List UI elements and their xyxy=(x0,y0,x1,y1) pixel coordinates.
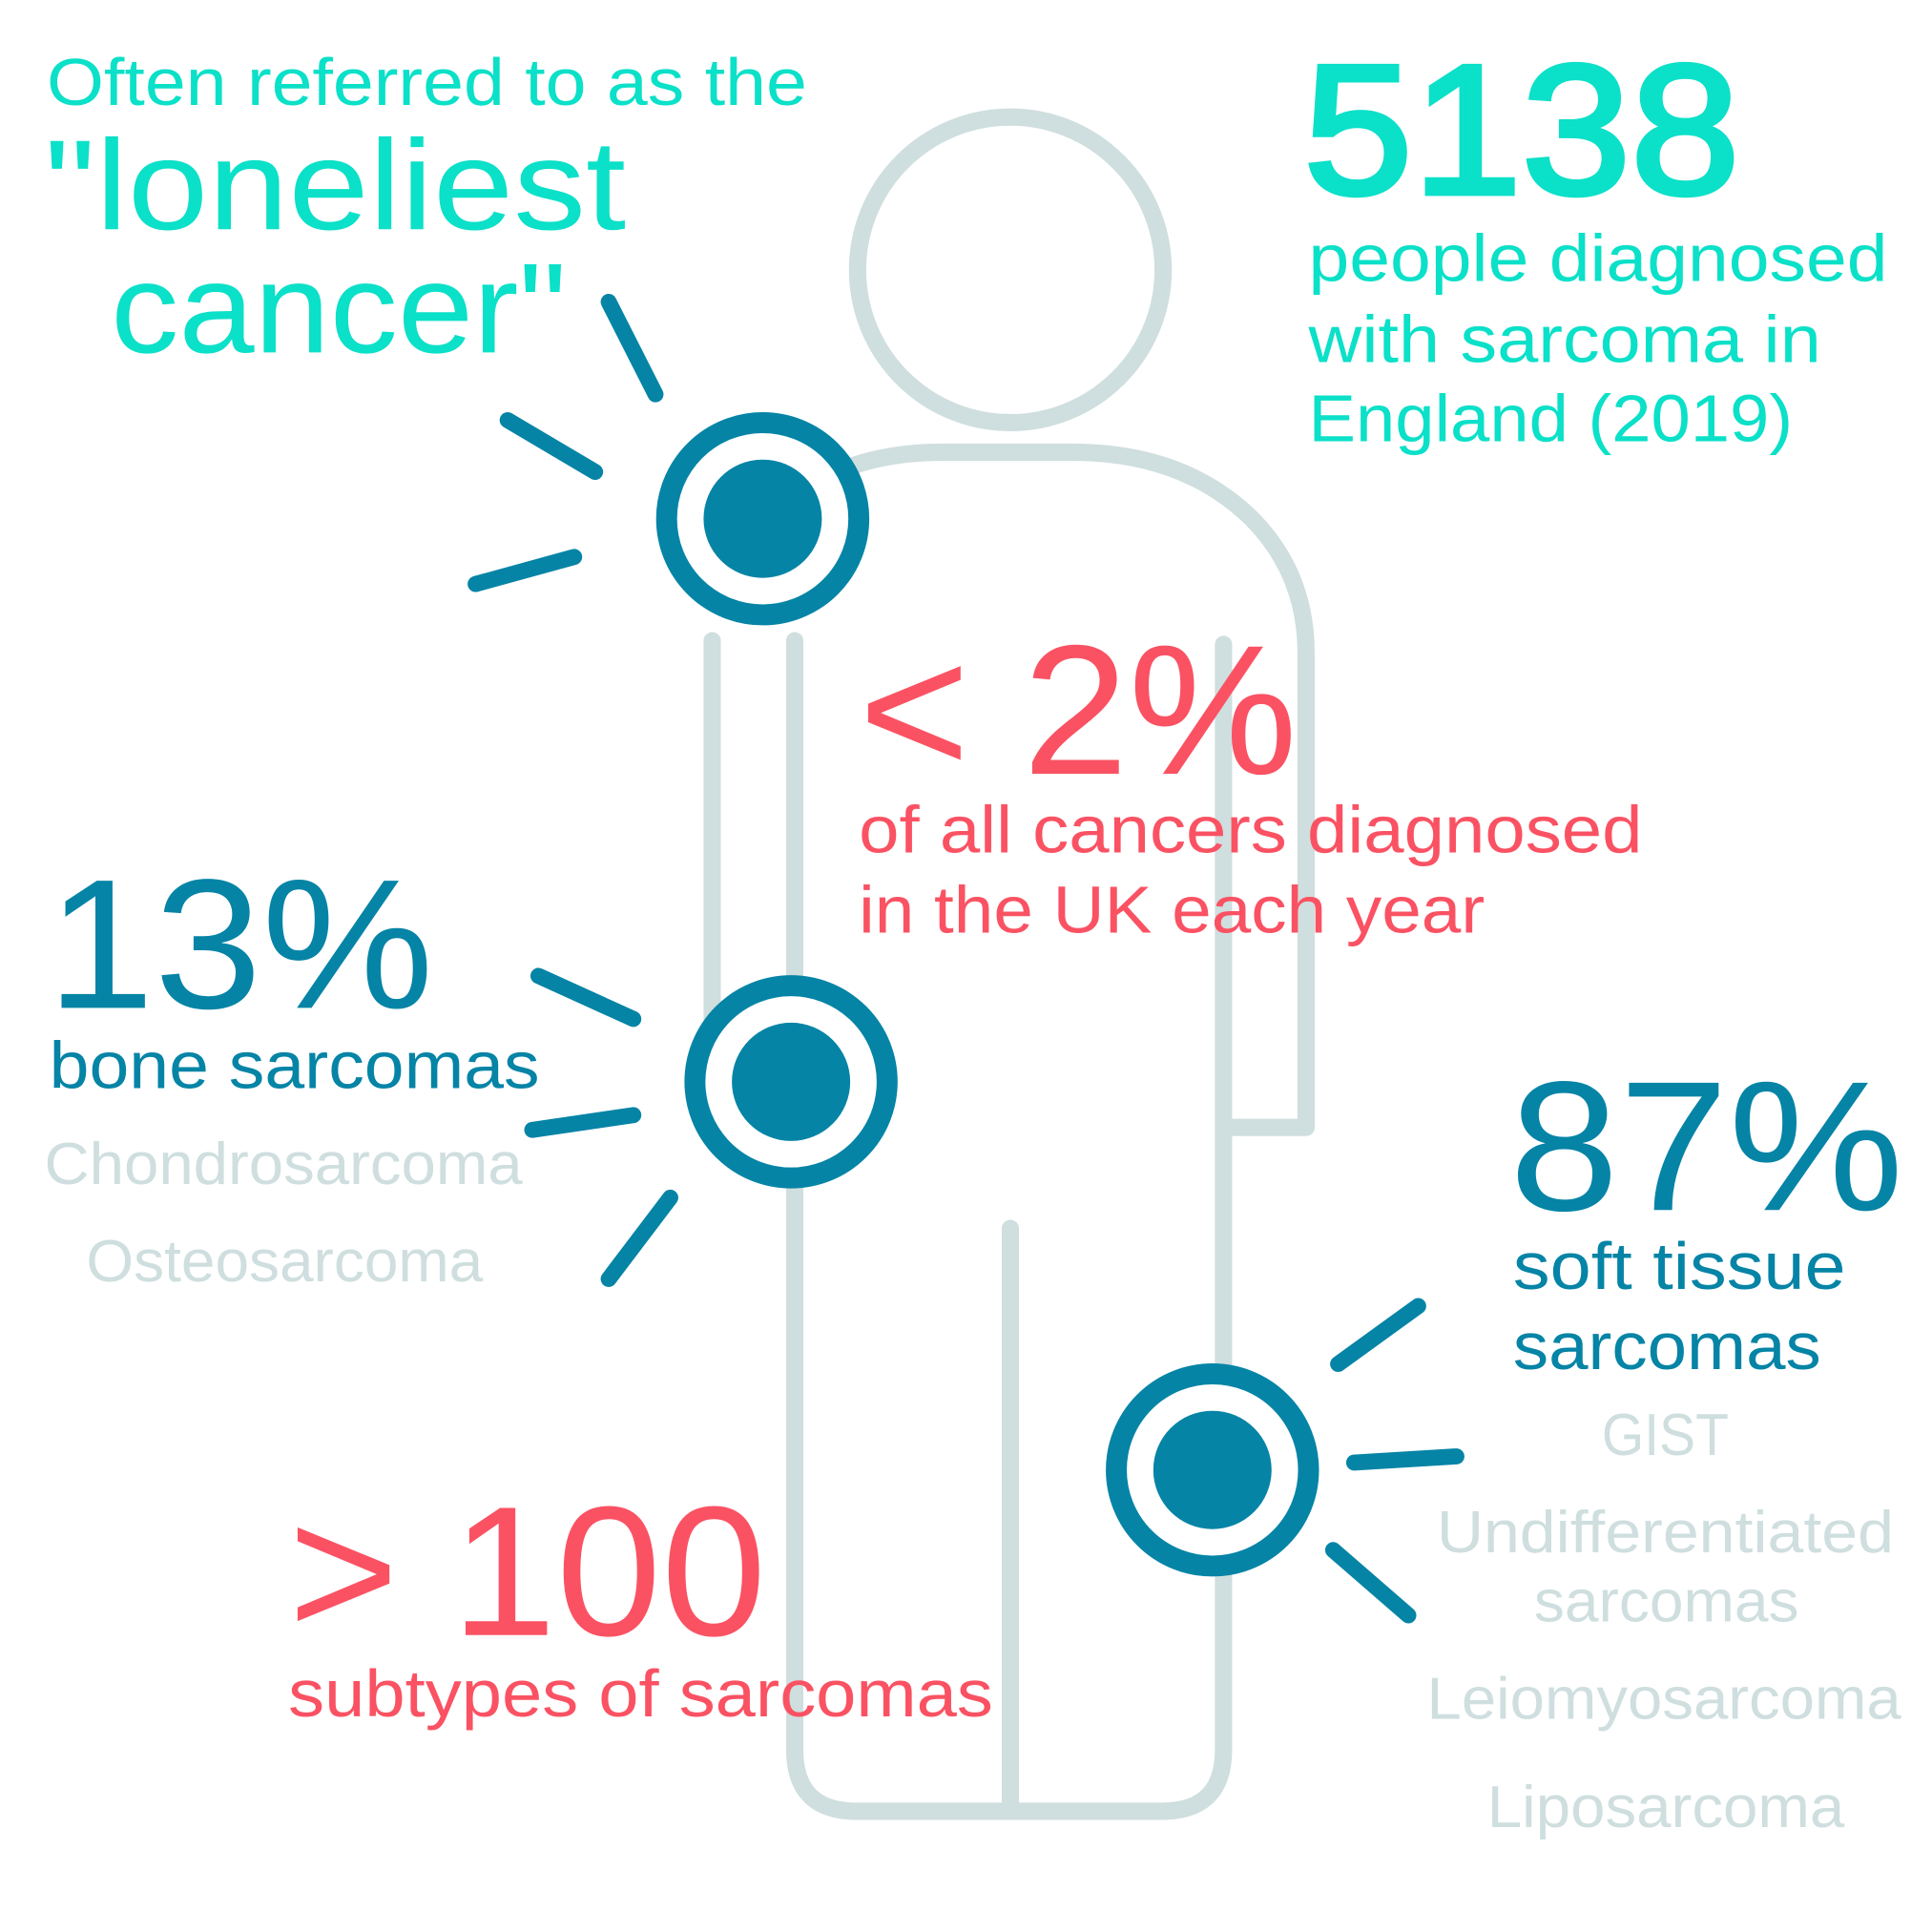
stat: 5138: with sarcoma in xyxy=(1307,302,1821,377)
stat: 87% soft tissue: sarcomas xyxy=(1513,1309,1821,1383)
marker: top shoulder xyxy=(476,301,859,614)
stat: 5138: 5138 xyxy=(1303,28,1740,234)
stat: more than 100 subtypes xyxy=(288,1469,993,1731)
stat: 87% soft tissue: Liposarcoma xyxy=(1487,1775,1845,1840)
stat: 13% bone sarcomas: 13% xyxy=(47,841,434,1048)
stat: less than 2%: in the UK each year xyxy=(859,873,1485,947)
stat: 5138 xyxy=(1303,28,1888,455)
title: loneliest cancer xyxy=(44,45,807,380)
marker: lower right xyxy=(1116,1306,1456,1615)
stat: 5138: England (2019) xyxy=(1309,381,1793,455)
stat: 13% bone sarcomas: bone sarcomas xyxy=(50,1028,540,1102)
stat: 13% bone sarcomas xyxy=(44,841,540,1295)
title: loneliest cancer: cancer" xyxy=(111,237,567,380)
stat: 5138: people diagnosed xyxy=(1309,220,1888,295)
stat: less than 2%: < 2% xyxy=(859,608,1298,814)
stat: 87% soft tissue: Leiomyosarcoma xyxy=(1427,1667,1901,1733)
stat: 87% soft tissue: GIST xyxy=(1602,1402,1729,1468)
stat: less than 2% xyxy=(859,608,1643,947)
stat: 87% soft tissue: soft tissue xyxy=(1513,1229,1846,1303)
marker: middle xyxy=(532,976,887,1279)
title: loneliest cancer: "loneliest xyxy=(44,114,626,257)
stat: 13% bone sarcomas: Osteosarcoma xyxy=(86,1229,484,1295)
stat: more than 100 subtypes: > 100 xyxy=(288,1469,766,1675)
body figure outline xyxy=(712,117,1306,1811)
stat: less than 2%: of all cancers diagnosed xyxy=(859,793,1643,867)
stat: more than 100 subtypes: subtypes of sarcomas xyxy=(288,1656,993,1731)
stat: 13% bone sarcomas: Chondrosarcoma xyxy=(44,1132,523,1197)
stat: 87% soft tissue xyxy=(1427,1044,1903,1840)
stat: 87% soft tissue: 87% xyxy=(1509,1044,1903,1250)
title: loneliest cancer: Often referred to as the xyxy=(47,45,807,119)
stat: 87% soft tissue: Undifferentiated xyxy=(1437,1500,1894,1566)
stat: 87% soft tissue: sarcomas xyxy=(1534,1569,1799,1635)
